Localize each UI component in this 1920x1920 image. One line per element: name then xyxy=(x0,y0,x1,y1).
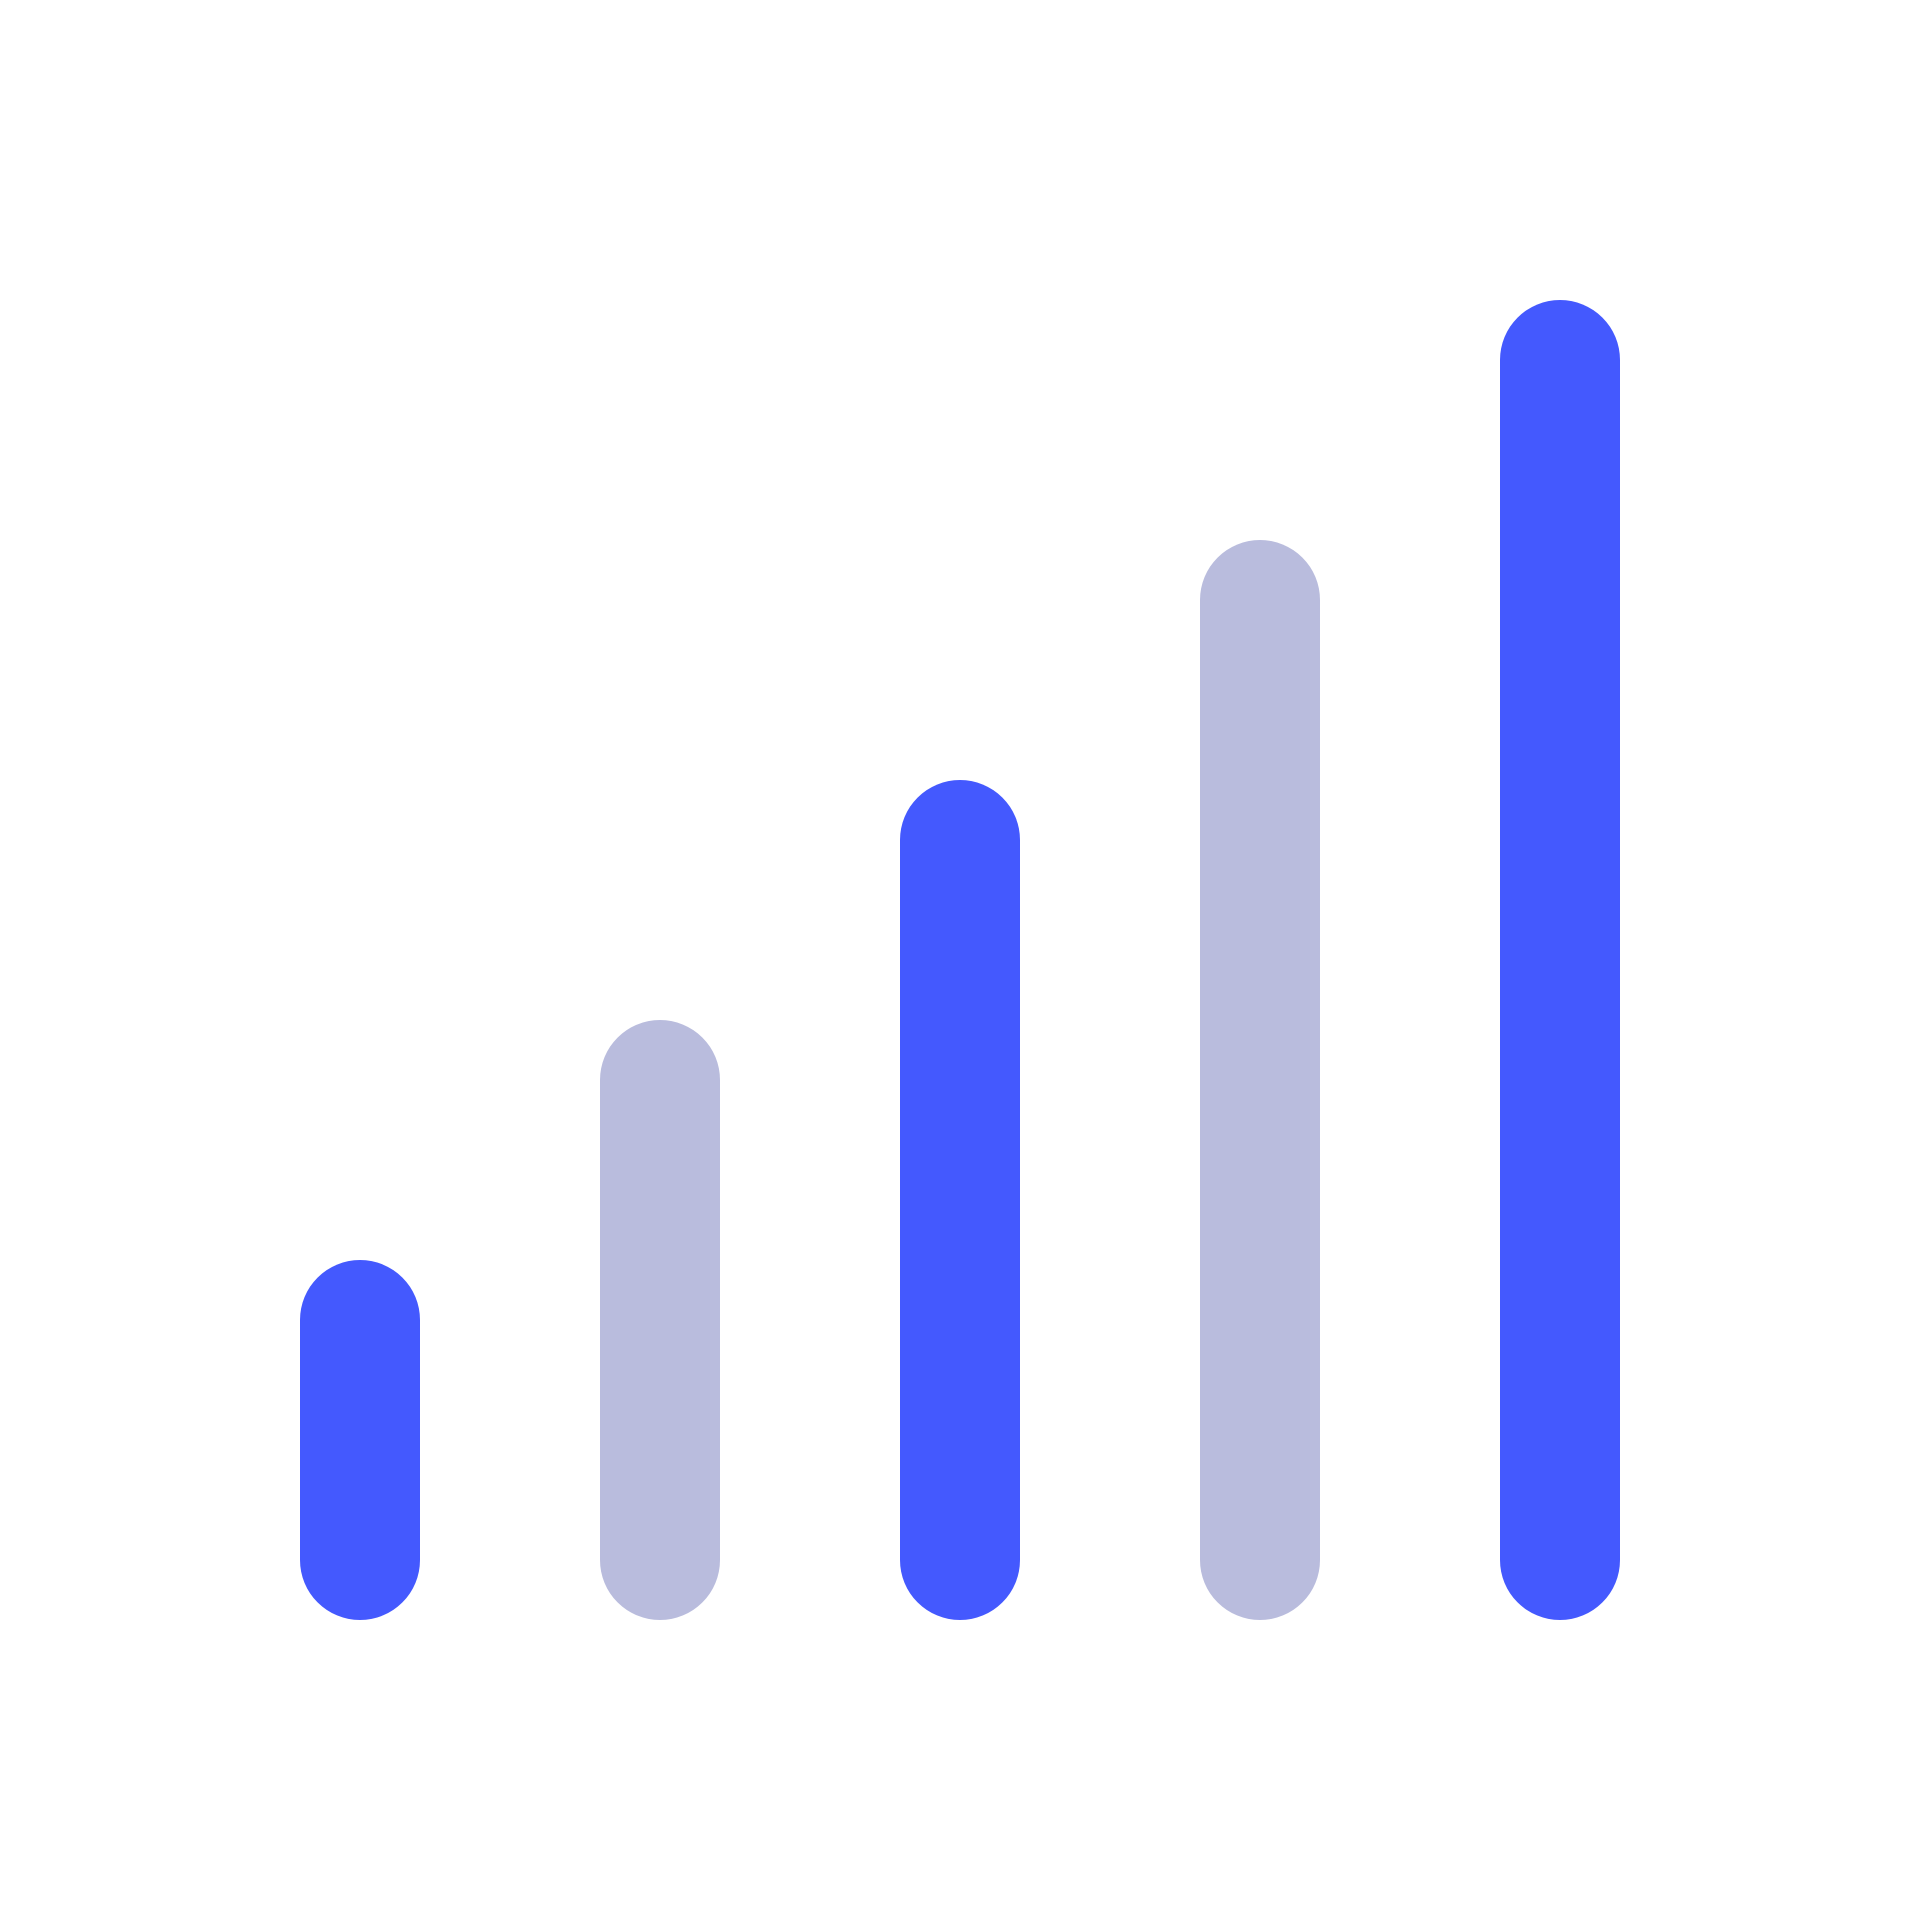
bar 2: lavender xyxy=(600,1020,720,1620)
bar 1: blue xyxy=(300,1260,420,1620)
bar 5: blue xyxy=(1500,300,1620,1620)
bar 3: blue xyxy=(900,780,1020,1620)
bar 4: lavender xyxy=(1200,540,1320,1620)
